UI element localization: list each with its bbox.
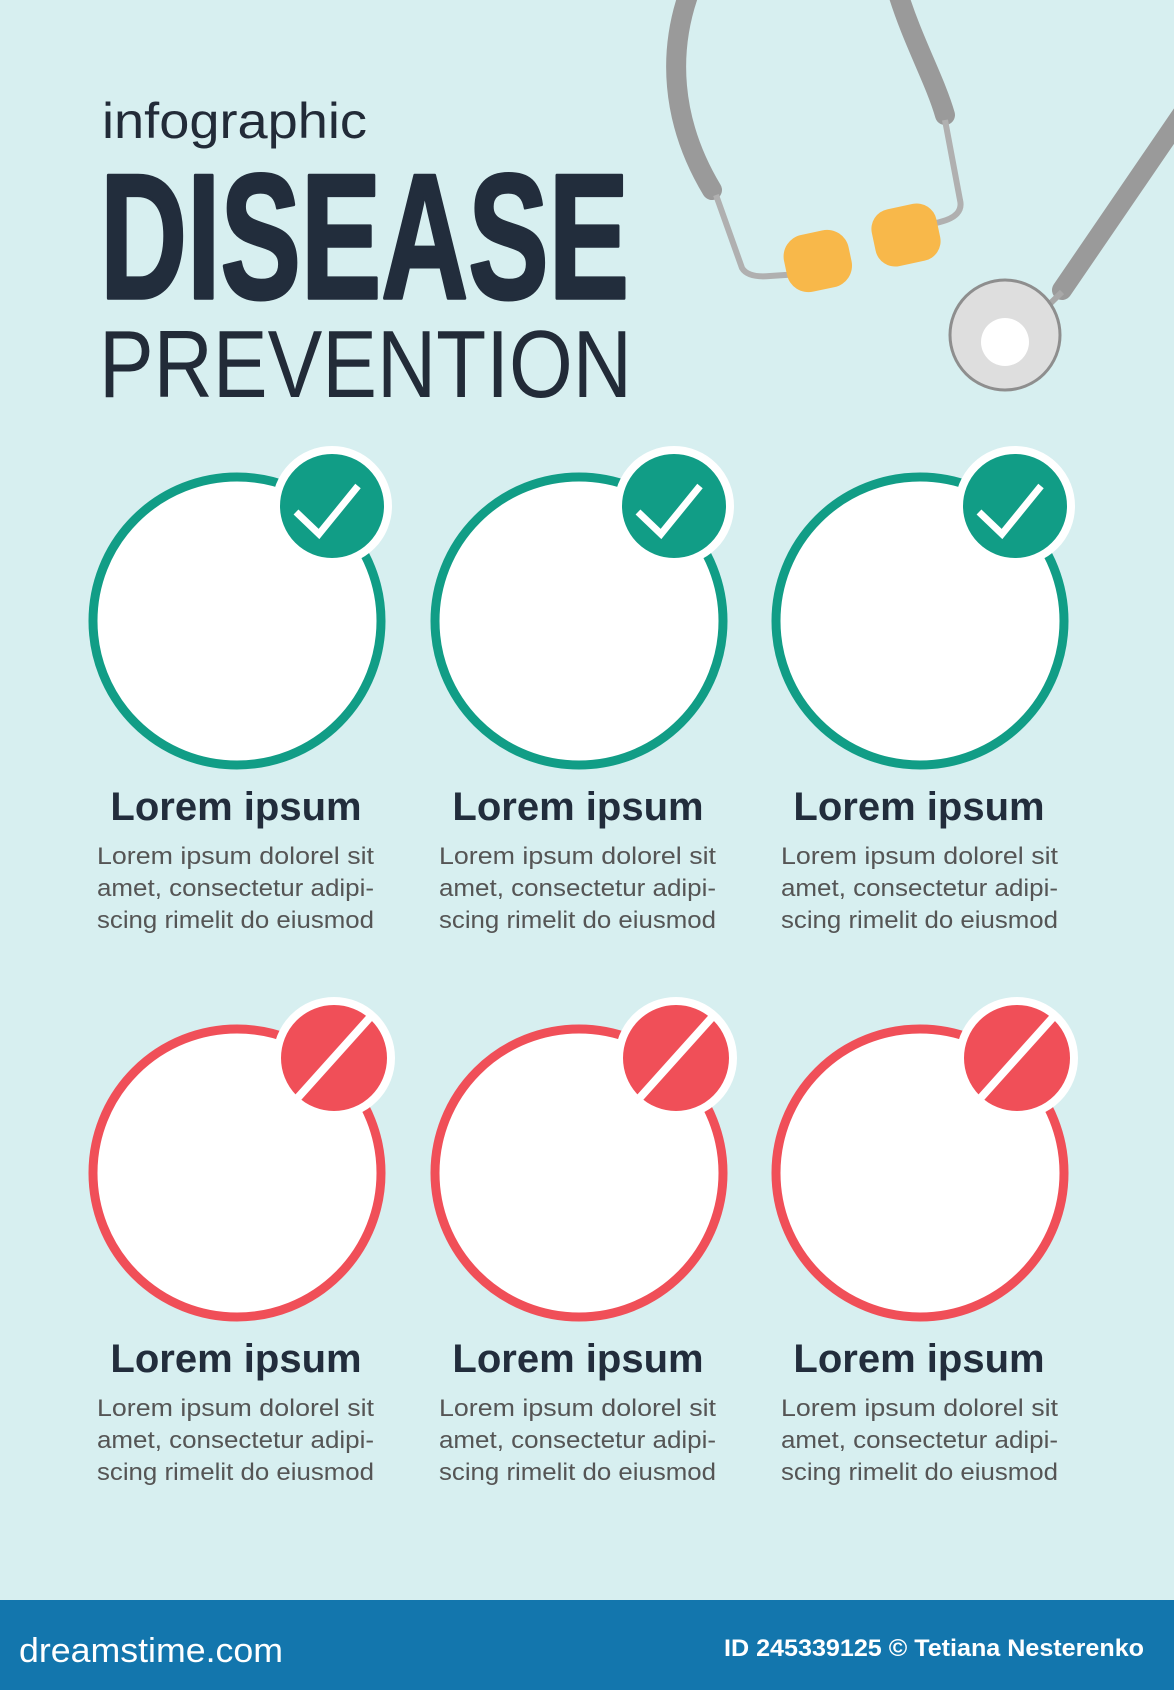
text: row 2: Lorem ipsum dolorel sit bbox=[97, 1395, 374, 1422]
text: row 2 bbox=[97, 1337, 1058, 1486]
text: row 2: Lorem ipsum bbox=[110, 1337, 362, 1381]
circle 2 bbox=[435, 477, 723, 765]
text: row 2: scing rimelit do eiusmod bbox=[439, 1459, 716, 1486]
circle 4 bbox=[93, 1029, 381, 1317]
text: row 1: Lorem ipsum bbox=[793, 785, 1045, 829]
text: row 1: scing rimelit do eiusmod bbox=[97, 907, 374, 934]
text: row 1: Lorem ipsum bbox=[452, 785, 704, 829]
text: row 1 bbox=[97, 785, 1058, 934]
icon: pill badge 2 bbox=[619, 1001, 733, 1115]
footer: brand: dreamstime.com bbox=[19, 1632, 283, 1670]
text: row 1: amet, consectetur adipi- bbox=[439, 875, 716, 902]
panel: row 1 (check) bbox=[93, 450, 1071, 765]
text: row 1: Lorem ipsum dolorel sit bbox=[439, 843, 716, 870]
text: row 2: Lorem ipsum dolorel sit bbox=[439, 1395, 716, 1422]
icon: check badge 1 bbox=[276, 450, 388, 562]
text: row 1: scing rimelit do eiusmod bbox=[439, 907, 716, 934]
title: DISEASE: DISEASE bbox=[100, 137, 629, 336]
text: row 1: amet, consectetur adipi- bbox=[781, 875, 1058, 902]
icon: stethoscope bbox=[676, 0, 1174, 390]
text: row 2: amet, consectetur adipi- bbox=[97, 1427, 374, 1454]
title: infographic: infographic bbox=[102, 93, 367, 149]
text: row 2: amet, consectetur adipi- bbox=[439, 1427, 716, 1454]
icon: pill badge 1 bbox=[277, 1001, 391, 1115]
text: row 2: Lorem ipsum bbox=[793, 1337, 1045, 1381]
text: row 2: scing rimelit do eiusmod bbox=[97, 1459, 374, 1486]
text: row 2: scing rimelit do eiusmod bbox=[781, 1459, 1058, 1486]
text: row 2: amet, consectetur adipi- bbox=[781, 1427, 1058, 1454]
icon: check badge 2 bbox=[618, 450, 730, 562]
icon: pill badge 3 bbox=[960, 1001, 1074, 1115]
text: row 1: scing rimelit do eiusmod bbox=[781, 907, 1058, 934]
title: PREVENTION: PREVENTION bbox=[99, 311, 632, 418]
footer bar bbox=[0, 1600, 1174, 1690]
panel: row 2 (pill) bbox=[93, 1001, 1074, 1317]
icon: check badge 3 bbox=[959, 450, 1071, 562]
text: row 1: Lorem ipsum bbox=[110, 785, 362, 829]
text: row 1: Lorem ipsum dolorel sit bbox=[97, 843, 374, 870]
circle 1 bbox=[93, 477, 381, 765]
circle 6 bbox=[776, 1029, 1064, 1317]
text: row 1: Lorem ipsum dolorel sit bbox=[781, 843, 1058, 870]
text: row 2: Lorem ipsum dolorel sit bbox=[781, 1395, 1058, 1422]
text: row 2: Lorem ipsum bbox=[452, 1337, 704, 1381]
circle 3 bbox=[776, 477, 1064, 765]
circle 5 bbox=[435, 1029, 723, 1317]
text: row 1: amet, consectetur adipi- bbox=[97, 875, 374, 902]
footer: credit: ID 245339125 © Tetiana Nesterenko bbox=[724, 1635, 1144, 1662]
